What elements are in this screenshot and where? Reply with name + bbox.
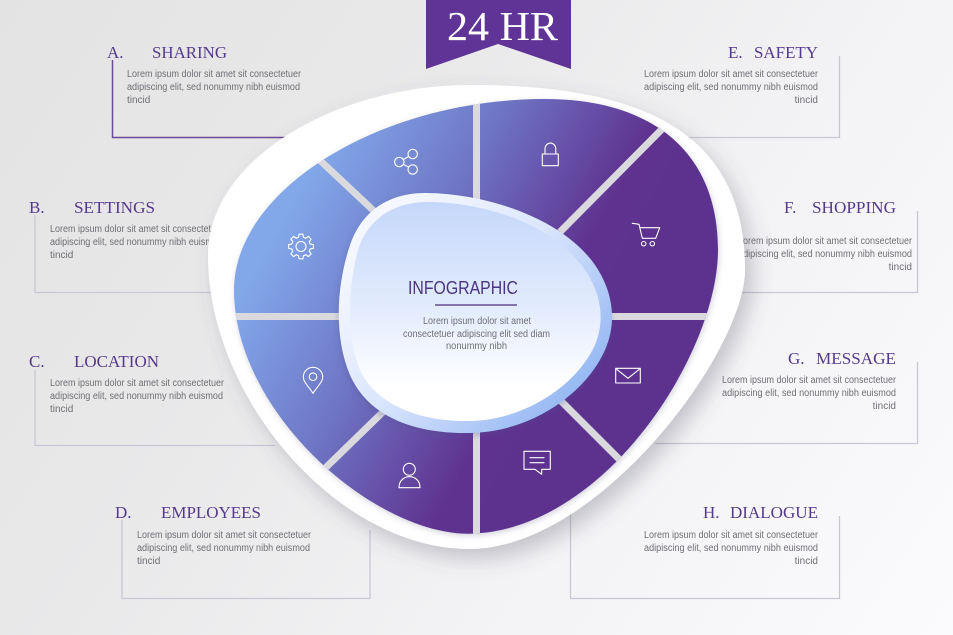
panel: G message: adipiscing elit, sed nonummy nibh euismod (722, 388, 896, 399)
center title: INFOGRAPHIC (408, 278, 518, 298)
panel: D employees: Lorem ipsum dolor sit amet sit consectetuer (137, 530, 312, 541)
panel: A sharing: tincid (127, 95, 150, 106)
panel: A sharing (107, 43, 302, 138)
panel: E safety (644, 43, 840, 138)
panel: D employees (115, 503, 370, 598)
panel: G message: MESSAGE (816, 349, 896, 368)
center text: Lorem ipsum dolor sit amet (423, 316, 531, 327)
center text: nonummy nibh (446, 341, 507, 352)
panel: A sharing: A. (107, 43, 124, 62)
panel: F shopping: adipiscing elit, sed nonummy nibh euismod (738, 249, 912, 260)
icon: mail (616, 368, 640, 383)
panel: H dialogue: tincid (795, 556, 818, 567)
icon: share (395, 149, 417, 174)
icon: pin (303, 367, 323, 393)
panel: H dialogue: Lorem ipsum dolor sit amet sit consectetuer (644, 530, 819, 541)
panel: E safety: Lorem ipsum dolor sit amet sit consectetuer (644, 69, 819, 80)
panel: H dialogue: adipiscing elit, sed nonummy nibh euismod (644, 543, 818, 554)
panel: A sharing: SHARING (152, 43, 227, 62)
panel: E safety: tincid (795, 95, 818, 106)
panel: G message: Lorem ipsum dolor sit amet sit consectetuer (722, 375, 897, 386)
icon: cart (632, 223, 660, 246)
panel: E safety: SAFETY (754, 43, 818, 62)
panel: B settings: tincid (50, 250, 73, 261)
panel: C location: LOCATION (74, 352, 159, 371)
panel: E safety: adipiscing elit, sed nonummy nibh euismod (644, 82, 818, 93)
panel: F shopping: F. (784, 198, 796, 217)
panel: D employees: adipiscing elit, sed nonummy nibh euismod (137, 543, 310, 554)
panel: G message: G. (788, 349, 805, 368)
center text: consectetuer adipiscing elit sed diam (403, 329, 550, 340)
panel: H dialogue: DIALOGUE (730, 503, 818, 522)
center text (403, 316, 550, 352)
banner: 24 HR (426, 0, 571, 69)
panel: A sharing: Lorem ipsum dolor sit amet sit consectetuer (127, 69, 302, 80)
panel: B settings: Lorem ipsum dolor sit amet sit consectetuer (50, 224, 225, 235)
icon: lock (542, 143, 558, 166)
icon: dialogue (524, 451, 550, 474)
white blob backing (208, 85, 745, 549)
panel: B settings: adipiscing elit, sed nonummy nibh euismod (50, 237, 223, 248)
panel: C location: C. (29, 352, 45, 371)
panel: G message: tincid (873, 401, 896, 412)
panel: B settings: B. (29, 198, 45, 217)
panel: A sharing: adipiscing elit, sed nonummy nibh euismod (127, 82, 300, 93)
center blob (339, 193, 612, 433)
panel: C location: adipiscing elit, sed nonummy nibh euismod (50, 391, 223, 402)
panel: H dialogue (570, 500, 840, 598)
panel: D employees: D. (115, 503, 132, 522)
panel: E safety: E. (728, 43, 743, 62)
panel: C location (29, 352, 275, 446)
banner: 24 HR: 24 HR (447, 3, 559, 49)
panel: B settings (29, 198, 225, 292)
panel: D employees: tincid (137, 556, 160, 567)
panel: B settings: SETTINGS (74, 198, 155, 217)
icon: person (399, 463, 420, 488)
panel: F shopping (735, 198, 918, 292)
panel: F shopping: Lorem ipsum dolor sit amet sit consectetuer (738, 236, 913, 247)
icon: gear (289, 234, 313, 259)
panel: F shopping: SHOPPING (812, 198, 896, 217)
panel: F shopping: tincid (889, 262, 912, 273)
panel: H dialogue: H. (703, 503, 720, 522)
panel: C location: Lorem ipsum dolor sit amet sit consectetuer (50, 378, 225, 389)
panel: G message (655, 349, 918, 444)
panel: D employees: EMPLOYEES (161, 503, 261, 522)
panel: C location: tincid (50, 404, 73, 415)
segmented ring (225, 90, 725, 545)
